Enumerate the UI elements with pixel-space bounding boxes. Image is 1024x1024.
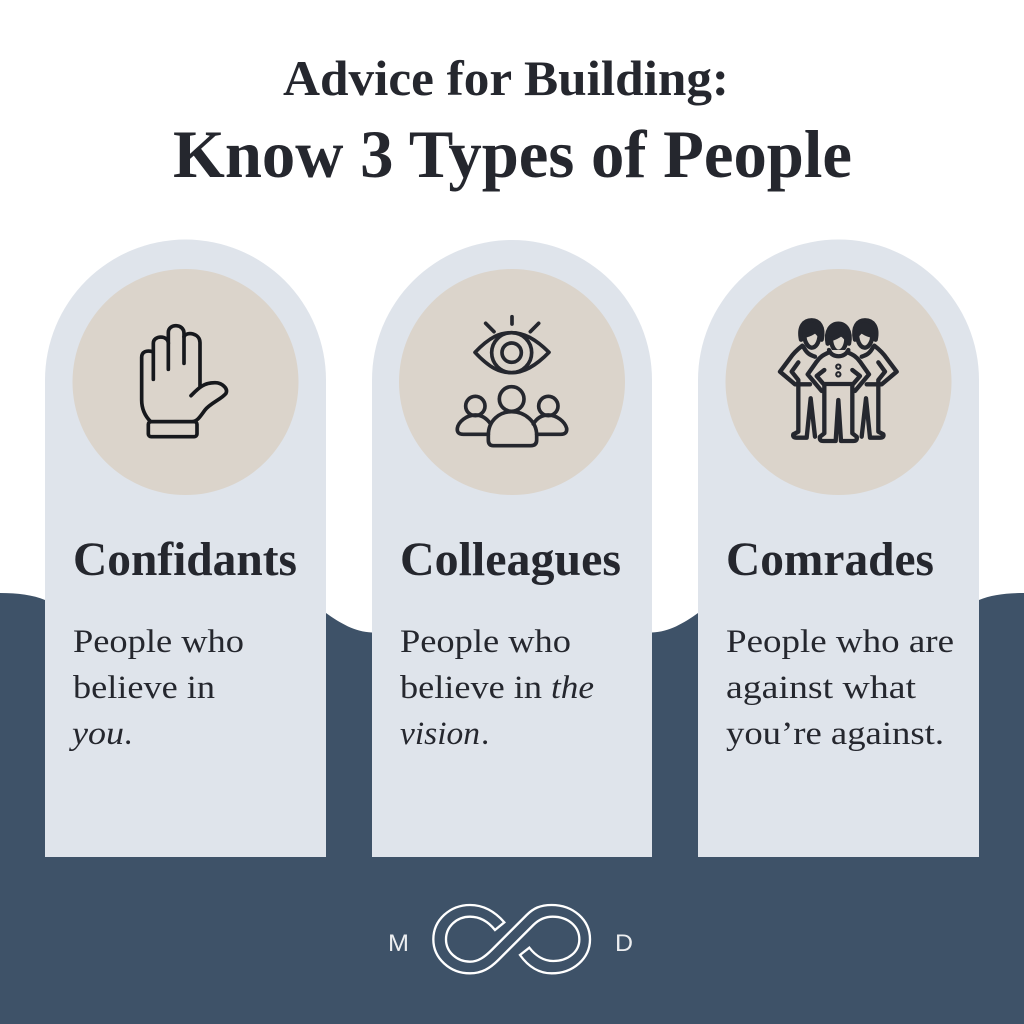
centre person (808, 324, 869, 441)
background wave (0, 593, 1024, 1024)
left person (780, 320, 822, 438)
right person (854, 320, 897, 438)
title line 2: Know 3 Types of People (173, 116, 852, 192)
card background (372, 240, 652, 857)
body text: confidants: People who (73, 624, 244, 660)
body text: confidants: . (124, 716, 132, 752)
body text: colleagues: vision (400, 716, 480, 752)
icon circle (399, 269, 625, 495)
heading: colleagues: Colleagues (400, 533, 621, 586)
logo letter D: D (615, 930, 633, 957)
body text: confidants: believe in (73, 670, 215, 706)
body text: comrades (726, 624, 954, 752)
title (173, 50, 852, 192)
icon: infinity logo (433, 905, 590, 973)
body text: colleagues: the (551, 670, 594, 706)
panel: confidants (45, 240, 326, 857)
body text: colleagues (400, 624, 594, 752)
icon: eye and people (457, 317, 567, 446)
panel: comrades (698, 240, 979, 857)
icon: three people (780, 320, 897, 441)
title line 1: Advice for Building: (283, 50, 729, 106)
logo (388, 905, 633, 973)
body text: comrades: against what (726, 670, 916, 706)
body text: colleagues: believe in (400, 670, 542, 706)
heading: comrades: Comrades (726, 533, 934, 586)
body text: confidants (69, 624, 244, 752)
body text: comrades: People who are (726, 624, 954, 660)
body text: colleagues: People who (400, 624, 571, 660)
icon circle (726, 269, 952, 495)
card background (45, 240, 326, 857)
body text: colleagues: . (481, 716, 489, 752)
icon circle (72, 269, 298, 495)
body text: confidants: you (69, 716, 124, 752)
body text: comrades: you’re against. (726, 716, 944, 752)
logo letter M: M (388, 930, 409, 957)
card background (698, 240, 979, 857)
heading: confidants: Confidants (73, 533, 297, 586)
icon: hand (142, 326, 226, 437)
panel: colleagues (372, 240, 652, 857)
